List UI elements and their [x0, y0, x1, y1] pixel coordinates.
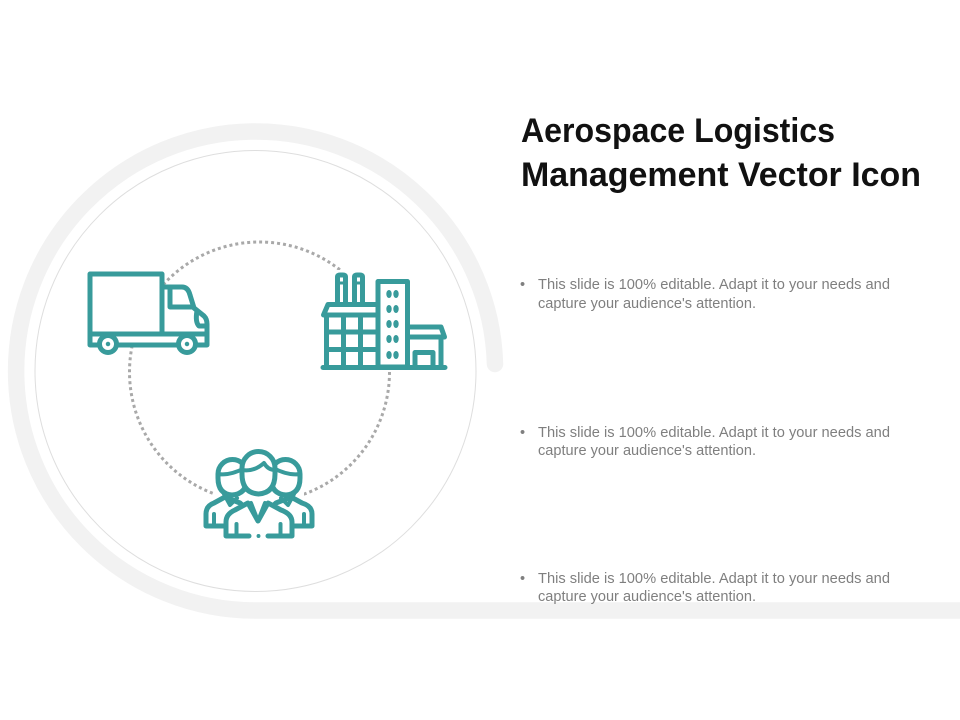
bullet text 1 [520, 277, 890, 312]
bullet text 2: capture your audience's attention. [538, 443, 756, 459]
thick ring and band [16, 132, 960, 610]
bullet text 2: • [520, 425, 525, 441]
bullet text 1: capture your audience's attention. [538, 296, 756, 312]
icon: factory [318, 270, 450, 372]
bullet text 3: This slide is 100% editable. Adapt it to your needs and [538, 571, 890, 587]
thin circle [35, 150, 476, 592]
bullet text 3: capture your audience's attention. [538, 589, 756, 605]
bullet text 1: This slide is 100% editable. Adapt it to your needs and [538, 277, 890, 293]
bullet text 2 [520, 425, 890, 459]
bullet text 2: This slide is 100% editable. Adapt it to your needs and [538, 425, 890, 441]
title: Aerospace Logistics [521, 112, 835, 150]
title: Management Vector Icon [521, 156, 921, 194]
bullet text 3 [520, 571, 890, 605]
bullet text 1: • [520, 277, 525, 293]
dotted circle [130, 242, 390, 502]
bullet text 3: • [520, 571, 525, 587]
title [521, 112, 921, 194]
icon: truck [90, 274, 207, 352]
icon: team of people [206, 452, 312, 537]
